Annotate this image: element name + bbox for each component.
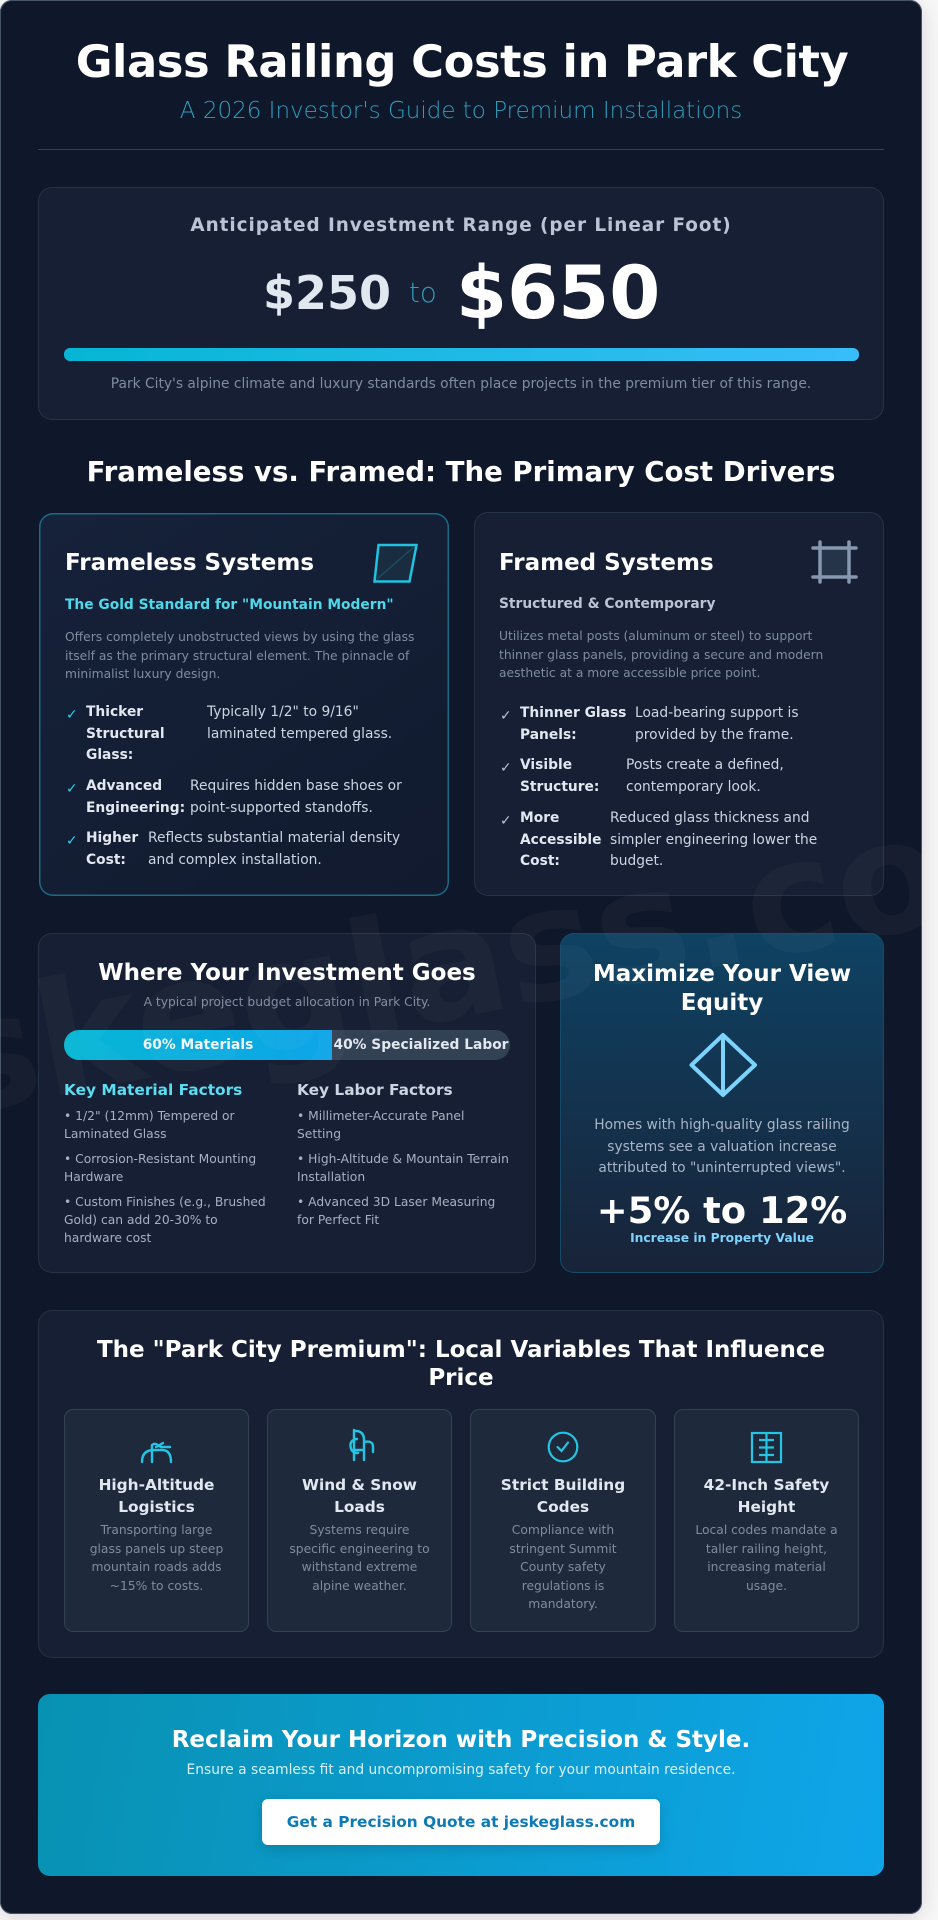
icon: wind and snow — [349, 1428, 374, 1462]
item: more accessible cost: Accessible — [520, 832, 602, 848]
frameless title: Frameless Systems — [65, 550, 314, 576]
material factors — [64, 1081, 266, 1245]
item: visible structure: ✓ — [500, 760, 512, 776]
description — [90, 1523, 223, 1592]
panel: where your investment goes — [38, 933, 536, 1273]
description: Systems require — [310, 1523, 409, 1537]
framed list — [500, 705, 817, 869]
framed title: Framed Systems — [499, 550, 714, 576]
card: strict building codes — [470, 1409, 656, 1632]
material heading: Key Material Factors — [64, 1081, 242, 1099]
equity caption: Increase in Property Value — [630, 1231, 814, 1245]
description: alpine weather. — [312, 1578, 407, 1592]
labor list: Installation • Advanced 3D Laser Measuring — [297, 1170, 495, 1209]
header divider — [38, 149, 884, 150]
card: high-altitude logistics — [64, 1409, 249, 1632]
item: higher cost: Higher — [86, 830, 138, 846]
item: higher cost: Reflects substantial material density — [148, 830, 400, 846]
item: visible structure: Visible — [520, 757, 572, 773]
title — [302, 1476, 417, 1516]
description: increasing material — [707, 1560, 826, 1574]
title — [99, 1476, 214, 1516]
item: higher cost — [66, 830, 400, 868]
premium title: Price — [428, 1365, 494, 1391]
material list: Hardware • Custom Finishes (e.g., Brushed — [64, 1170, 266, 1209]
item: advanced engineering: Requires hidden base shoes or — [190, 778, 402, 794]
labor list: for Perfect Fit — [297, 1213, 379, 1227]
description: regulations is — [522, 1578, 604, 1592]
description: Transporting large — [101, 1523, 212, 1537]
icon: glass pane — [373, 544, 418, 583]
card: wind and snow loads — [267, 1409, 452, 1632]
item: thinner glass — [500, 705, 799, 742]
panel: investment range — [38, 187, 884, 420]
item: more accessible cost: ✓ — [500, 813, 512, 829]
cta button: Get a Precision Quote at jeskeglass.com — [287, 1813, 635, 1831]
labor list — [297, 1109, 509, 1227]
item: more accessible cost: Reduced glass thickness and — [610, 810, 810, 826]
range label: Anticipated Investment Range (per Linear Foot) — [190, 215, 732, 236]
framed description: thinner glass panels, providing a secure and modern — [499, 648, 823, 662]
title: Glass Railing Costs in Park City — [76, 35, 848, 88]
description: ~15% to costs. — [110, 1578, 203, 1592]
framed subtitle: Structured & Contemporary — [499, 596, 715, 612]
range bar — [64, 348, 859, 361]
description: County safety — [520, 1560, 606, 1574]
item: advanced engineering: ✓ — [66, 781, 78, 797]
card: 42-inch safety height — [674, 1409, 859, 1632]
item: thinner glass: provided by the frame. — [635, 726, 794, 742]
item: more accessible cost: Cost: — [520, 853, 560, 869]
panel: framed systems — [474, 512, 884, 896]
item: thicker glass: Thicker — [86, 704, 143, 720]
icon: check circle — [548, 1432, 578, 1462]
framed description: Utilizes metal posts (aluminum or steel) to support — [499, 629, 812, 643]
item: thicker glass: Structural — [86, 726, 165, 742]
cta heading: Reclaim Your Horizon with Precision & Style. — [172, 1727, 750, 1753]
description — [509, 1523, 617, 1611]
cta text: Ensure a seamless fit and uncompromising safety for your mountain residence. — [187, 1762, 735, 1778]
item: visible structure: Posts create a defined, — [626, 757, 784, 773]
labor factors — [297, 1081, 509, 1227]
high price: $650 — [456, 251, 660, 336]
item: visible structure — [500, 757, 784, 794]
title — [704, 1476, 829, 1516]
premium title — [97, 1337, 825, 1391]
equity title: Maximize Your View — [593, 961, 851, 987]
item: advanced engineering: point-supported standoffs. — [190, 800, 373, 816]
labor heading: Key Labor Factors — [297, 1081, 453, 1099]
item: more accessible cost: budget. — [610, 853, 663, 869]
item: thicker glass: Typically 1/2" to 9/16" — [207, 704, 359, 720]
description: specific engineering to — [289, 1542, 430, 1556]
materials segment: 60% Materials — [143, 1037, 253, 1053]
item: thicker glass: laminated tempered glass. — [207, 726, 392, 742]
budget title: Where Your Investment Goes — [98, 960, 476, 986]
equity figure: +5% to 12% — [597, 1189, 847, 1232]
item: higher cost: and complex installation. — [148, 852, 322, 868]
material list: Laminated Glass • Corrosion-Resistant Mounting — [64, 1127, 256, 1166]
item: visible structure: contemporary look. — [626, 778, 761, 794]
item: visible structure: Structure: — [520, 778, 599, 794]
panel: maximize your view equity — [560, 933, 884, 1273]
subtitle: A 2026 Investor's Guide to Premium Installations — [180, 98, 742, 124]
panel: frameless systems — [39, 513, 449, 896]
icon: framed panel — [811, 540, 858, 584]
title — [501, 1476, 625, 1516]
low price: $250 — [263, 266, 391, 320]
frameless description — [65, 630, 414, 681]
equity description: attributed to "uninterrupted views". — [598, 1160, 846, 1176]
title: High-Altitude — [99, 1476, 214, 1494]
item: more accessible cost: simpler engineering lower the — [610, 832, 817, 848]
title: Codes — [537, 1498, 589, 1516]
item: thinner glass: Thinner Glass — [520, 705, 626, 721]
material list: Gold) can add 20-30% to — [64, 1213, 218, 1227]
icon: height ruler — [750, 1432, 782, 1464]
description: glass panels up steep — [90, 1542, 223, 1556]
frameless description: Offers completely unobstructed views by using the glass — [65, 630, 414, 644]
labor list: Setting • High-Altitude & Mountain Terrain — [297, 1127, 509, 1166]
labor list: • Millimeter-Accurate Panel — [297, 1109, 464, 1123]
cta button — [262, 1799, 660, 1845]
material list: • 1/2" (12mm) Tempered or — [64, 1109, 235, 1123]
item: thicker glass: ✓ — [66, 707, 78, 723]
panel: park city premium — [38, 1310, 884, 1658]
equity title — [593, 961, 851, 1016]
description: taller railing height, — [706, 1542, 827, 1556]
description: Local codes mandate a — [695, 1523, 838, 1537]
item: thinner glass: Load-bearing support is — [635, 705, 799, 721]
description: usage. — [746, 1578, 787, 1592]
item: higher cost: ✓ — [66, 833, 78, 849]
item: thicker glass: Glass: — [86, 747, 133, 763]
frameless subtitle: The Gold Standard for "Mountain Modern" — [65, 597, 394, 613]
item: advanced engineering — [66, 778, 402, 816]
title: Strict Building — [501, 1476, 625, 1494]
framed description — [499, 629, 823, 680]
to: to — [409, 276, 437, 309]
title: 42-Inch Safety — [704, 1476, 829, 1494]
panel: call to action — [38, 1694, 884, 1876]
description: withstand extreme — [302, 1560, 417, 1574]
material list — [64, 1109, 266, 1245]
title: Height — [738, 1498, 795, 1516]
item: higher cost: Cost: — [86, 852, 126, 868]
title: Wind & Snow — [302, 1476, 417, 1494]
title: Logistics — [118, 1498, 195, 1516]
icon: mountain road — [140, 1442, 172, 1464]
item: thinner glass: Panels: — [520, 726, 577, 742]
material list: hardware cost — [64, 1231, 151, 1245]
description — [695, 1523, 838, 1592]
title: Loads — [334, 1498, 385, 1516]
section heading: Frameless vs. Framed: The Primary Cost Drivers — [87, 455, 835, 488]
item: advanced engineering: Engineering: — [86, 800, 185, 816]
materials segment — [64, 1030, 332, 1060]
budget subtitle: A typical project budget allocation in Park City. — [144, 995, 430, 1009]
icon: diamond — [689, 1032, 758, 1098]
item: more accessible cost — [500, 810, 817, 869]
item: advanced engineering: Advanced — [86, 778, 162, 794]
split bar — [64, 1030, 510, 1060]
equity title: Equity — [681, 990, 763, 1016]
frameless list — [66, 704, 402, 868]
item: thinner glass: ✓ — [500, 708, 512, 724]
description: stringent Summit — [509, 1542, 617, 1556]
framed description: aesthetic at a more accessible price point. — [499, 666, 760, 680]
range note: Park City's alpine climate and luxury standards often place projects in the premium tier of this range. — [111, 376, 811, 392]
item: more accessible cost: More — [520, 810, 559, 826]
description: mandatory. — [528, 1597, 598, 1611]
description: Compliance with — [512, 1523, 614, 1537]
labor segment: 40% Specialized Labor — [333, 1037, 508, 1053]
equity description: systems see a valuation increase — [607, 1138, 837, 1154]
equity description: Homes with high-quality glass railing — [594, 1117, 850, 1133]
frameless description: itself as the primary structural element. The pinnacle of — [65, 648, 409, 662]
description — [289, 1523, 430, 1592]
frameless description: minimalist luxury design. — [65, 667, 220, 681]
item: thicker glass — [66, 704, 392, 763]
premium title: The "Park City Premium": Local Variables That Influence — [97, 1337, 825, 1363]
equity description — [594, 1117, 850, 1176]
description: mountain roads adds — [91, 1560, 222, 1574]
